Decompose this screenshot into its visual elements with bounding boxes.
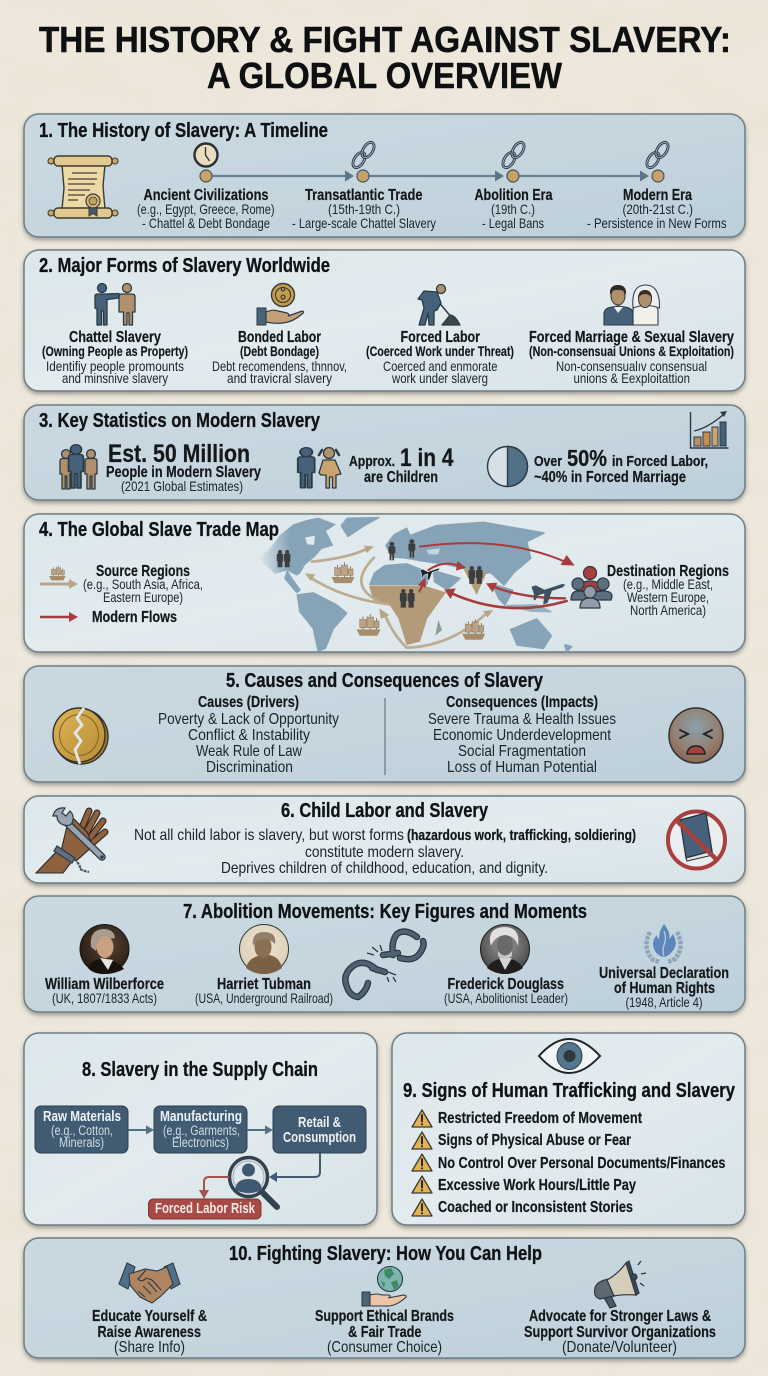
warning sign list: Restricted Freedom of Movement: [438, 1110, 642, 1127]
legend: source regions: (e.g., South Asia, Africa,: [83, 576, 203, 592]
box: raw materials: Minerals): [59, 1135, 104, 1150]
panel: 10 how you can help: [24, 1238, 745, 1358]
panel: 5 causes and consequences: [24, 666, 745, 782]
heading: causes and consequences: 5. Causes and Consequences of Slavery: [226, 669, 543, 692]
stat: 50 million: Est. 50 Million: [108, 440, 250, 468]
legend: destination regions: [607, 563, 729, 618]
legend: destination regions: North America): [630, 602, 706, 618]
form: bonded labor: Debt recomendens, thnnov,: [212, 358, 347, 374]
panel: 1 timeline: [24, 114, 745, 237]
person: Tubman: Harriet Tubman: [217, 976, 311, 993]
box: raw materials: Raw Materials: [43, 1108, 121, 1125]
stat: 50 million: (2021 Global Estimates): [121, 478, 243, 494]
form: forced marriage: Non-consensualıv consensual: [556, 358, 707, 374]
icon: magnifier with person: [230, 1158, 277, 1207]
icon: chains: [350, 140, 671, 170]
stat: 1 in 4: are Children: [364, 469, 438, 486]
heading: timeline: 1. The History of Slavery: A Timeline: [39, 119, 328, 142]
icon: rising bar chart: [690, 411, 728, 448]
declaration of human rights: [599, 965, 729, 1010]
warning sign list: Excessive Work Hours/Little Pay: [438, 1177, 636, 1194]
form: bonded labor: (Debt Bondage): [240, 344, 319, 359]
help: advocate: [524, 1308, 716, 1356]
icon: megaphone: [595, 1261, 646, 1308]
help: ethical brands: (Consumer Choice): [327, 1339, 442, 1356]
legend: destination regions: (e.g., Middle East,: [623, 576, 713, 592]
consequences list: Consequences (Impacts): [446, 694, 598, 711]
icon: two children: [298, 448, 341, 488]
box: manufacturing: Manufacturing: [160, 1108, 242, 1125]
panel: 7 abolition movements: [24, 896, 745, 1012]
declaration of human rights: (1948, Article 4): [626, 994, 702, 1010]
person: Wilberforce: William Wilberforce: [45, 976, 164, 993]
causes list: Conflict & Instability: [188, 727, 310, 744]
help: advocate: Advocate for Stronger Laws &: [529, 1308, 711, 1325]
icon: no book: [668, 812, 725, 868]
consequences list: Economic Underdevelopment: [433, 727, 611, 744]
timeline: abolition era: (19th C.): [491, 201, 535, 217]
consequences list: Severe Trauma & Health Issues: [428, 711, 616, 728]
form: chattel slavery: (Owning People as Property): [42, 344, 188, 359]
person: Douglass: (USA, Abolitionist Leader): [444, 990, 568, 1006]
warning sign list: [412, 1110, 726, 1216]
form: chattel slavery: Identifiy people promounts: [46, 358, 184, 374]
stat: 50 million: People in Modern Slavery: [106, 464, 261, 481]
person: Wilberforce: (UK, 1807/1833 Acts): [52, 990, 157, 1006]
icon: broken coin: [53, 708, 108, 764]
box: retail: [273, 1106, 366, 1153]
heading: trade map: 4. The Global Slave Trade Map: [39, 518, 279, 541]
legend: source regions: Eastern Europe): [103, 589, 183, 605]
stat: 1 in 4: [349, 444, 454, 486]
icon: half pie: [488, 446, 528, 486]
form: chattel slavery: Chattel Slavery: [69, 329, 161, 346]
help: educate: Raise Awareness: [98, 1324, 201, 1341]
timeline: ancient civilizations: [137, 187, 274, 231]
panel: 9 signs of trafficking: [392, 1033, 745, 1225]
box: forced labor risk: Forced Labor Risk: [155, 1201, 256, 1217]
legend: destination regions: Destination Regions: [607, 563, 729, 580]
causes list: Poverty & Lack of Opportunity: [158, 711, 339, 728]
consequences list: Loss of Human Potential: [447, 759, 597, 776]
child labor text: Deprives children of childhood, education, and dignity.: [221, 860, 548, 877]
child labor text: [134, 827, 636, 877]
declaration of human rights: Universal Declaration: [599, 965, 729, 982]
timeline: ancient civilizations: (e.g., Egypt, Greece, Rome): [137, 201, 274, 217]
risk arrow: [199, 1177, 229, 1199]
portrait: Tubman: [240, 924, 288, 974]
timeline: transatlantic trade: Transatlantic Trade: [305, 187, 423, 204]
icon: clock: [194, 144, 218, 166]
form: forced marriage: [529, 329, 734, 386]
icon: UN human rights flame: [646, 924, 681, 962]
timeline: abolition era: [474, 187, 553, 231]
person: Douglass: [444, 976, 568, 1006]
warning sign list: Coached or Inconsistent Stories: [438, 1199, 633, 1216]
box: retail: Retail &: [298, 1114, 341, 1131]
form: forced labor: work under slaverg: [391, 370, 488, 386]
child labor text: Not all child labor is slavery, but worst forms: [134, 827, 404, 844]
icon: coin over hand: [257, 284, 304, 325]
portrait: Wilberforce: [80, 924, 129, 974]
icon: distressed face: [669, 708, 723, 763]
box: raw materials: [35, 1106, 128, 1153]
legend: destination regions: Western Europe,: [627, 589, 709, 605]
form: forced labor: [366, 329, 514, 386]
legend: modern flows: [40, 609, 177, 626]
icon: broken chain: [345, 932, 424, 997]
timeline: abolition era: - Legal Bans: [482, 215, 544, 231]
heading: major forms: 2. Major Forms of Slavery Worldwide: [39, 254, 330, 277]
stat: 1 in 4: Approx.: [349, 454, 395, 470]
form: forced labor: Forced Labor: [400, 329, 480, 346]
panel: 8 supply chain: [24, 1033, 377, 1225]
timeline: modern era: (20th-21st C.): [622, 201, 693, 217]
icon: couple: [604, 285, 660, 325]
declaration of human rights: of Human Rights: [614, 980, 715, 997]
icon: destination group: [571, 566, 612, 608]
person: Tubman: (USA, Underground Railroad): [195, 990, 333, 1006]
stat: forced labor and marriage: Over: [534, 454, 562, 470]
stat: 1 in 4: 1 in 4: [400, 444, 454, 472]
portrait: Douglass: [480, 924, 530, 974]
timeline: modern era: Modern Era: [623, 187, 692, 204]
help: advocate: Support Survivor Organizations: [524, 1324, 716, 1341]
timeline: abolition era: Abolition Era: [474, 187, 553, 204]
box: manufacturing: [154, 1106, 247, 1153]
form: bonded labor: Bonded Labor: [238, 329, 321, 346]
causes list: Weak Rule of Law: [196, 743, 302, 760]
stat: forced labor and marriage: ~40% in Forced Marriage: [534, 469, 686, 486]
heading: supply chain: 8. Slavery in the Supply Chain: [82, 1058, 318, 1081]
icon: group of people: [60, 445, 97, 489]
timeline: ancient civilizations: - Chattel & Debt Bondage: [142, 215, 270, 231]
child labor text: (hazardous work, trafficking, soldiering): [407, 828, 636, 844]
timeline: transatlantic trade: [292, 187, 436, 231]
heading: child labor: 6. Child Labor and Slavery: [281, 799, 488, 822]
form: chattel slavery: and minsnive slavery: [62, 370, 168, 386]
panel: 3 key statistics: [24, 405, 745, 500]
form: bonded labor: and travicral slavery: [227, 370, 332, 386]
causes list: [158, 694, 339, 776]
box: forced labor risk: [148, 1199, 261, 1219]
box: raw materials: (e.g., Cotton,: [51, 1123, 113, 1138]
timeline: transatlantic trade: - Large-scale Chattel Slavery: [292, 215, 436, 231]
legend: source regions: Source Regions: [96, 563, 190, 580]
box: manufacturing: Electronics): [172, 1135, 229, 1150]
icon: eye: [539, 1039, 600, 1073]
heading: statistics: 3. Key Statistics on Modern Slavery: [39, 409, 320, 432]
stat: forced labor and marriage: [534, 445, 708, 486]
person: Wilberforce: [45, 976, 164, 1006]
legend: modern flows: Modern Flows: [92, 609, 177, 626]
title: A GLOBAL OVERVIEW: [207, 55, 562, 96]
icon: globe in hand: [362, 1266, 406, 1306]
causes list: Causes (Drivers): [198, 694, 299, 711]
help: educate: (Share Info): [114, 1339, 185, 1356]
icon: owner and person: [95, 284, 135, 325]
box: manufacturing: (e.g., Garments,: [163, 1123, 240, 1138]
title: THE HISTORY & FIGHT AGAINST SLAVERY:: [39, 19, 731, 60]
timeline: modern era: - Persistence in New Forms: [587, 215, 726, 231]
icon: scroll: [48, 156, 118, 218]
causes list: Discrimination: [206, 759, 293, 776]
help: ethical brands: Support Ethical Brands: [315, 1308, 454, 1325]
heading: abolition: 7. Abolition Movements: Key Figures and Moments: [183, 900, 587, 923]
title: [39, 19, 731, 96]
icon: child hand with wrench and shackle: [36, 808, 105, 873]
form: forced labor: Coerced and enmorate: [383, 358, 498, 374]
icon: laborer with shovel: [418, 284, 460, 325]
form: chattel slavery: [42, 329, 188, 386]
consequences list: [428, 694, 616, 776]
box: retail: Consumption: [283, 1129, 356, 1146]
timeline: ancient civilizations: Ancient Civilizations: [144, 187, 268, 204]
icon: handshake: [119, 1263, 180, 1303]
panel: 2 major forms: [24, 250, 745, 391]
world map with flows: [259, 518, 575, 652]
help: ethical brands: [315, 1308, 454, 1356]
timeline: modern era: [587, 187, 726, 231]
panel: 6 child labor: [24, 796, 745, 883]
arrows between boxes: [128, 1126, 320, 1182]
help: educate: Educate Yourself &: [92, 1308, 207, 1325]
stat: forced labor and marriage: in Forced Labor,: [612, 454, 708, 470]
timeline: transatlantic trade: (15th-19th C.): [328, 201, 400, 217]
form: bonded labor: [212, 329, 347, 386]
help: advocate: (Donate/Volunteer): [562, 1339, 677, 1356]
warning sign list: Signs of Physical Abuse or Fear: [438, 1132, 631, 1149]
form: forced marriage: unions & Eexploitattion: [574, 370, 690, 386]
help: educate: [92, 1308, 207, 1356]
person: Tubman: [195, 976, 333, 1006]
help: ethical brands: & Fair Trade: [348, 1324, 422, 1341]
form: forced labor: (Coerced Work under Threat): [366, 344, 514, 359]
child labor text: constitute modern slavery.: [305, 844, 464, 861]
stat: forced labor and marriage: 50%: [567, 445, 607, 471]
person: Douglass: Frederick Douglass: [448, 976, 564, 993]
legend: source regions: [40, 563, 203, 605]
timeline arrow line: [200, 170, 664, 182]
consequences list: Social Fragmentation: [458, 743, 586, 760]
stat: 50 million: [106, 440, 261, 494]
panel: 4 trade map: [24, 514, 745, 652]
heading: how you can help: 10. Fighting Slavery: How You Can Help: [229, 1242, 542, 1265]
